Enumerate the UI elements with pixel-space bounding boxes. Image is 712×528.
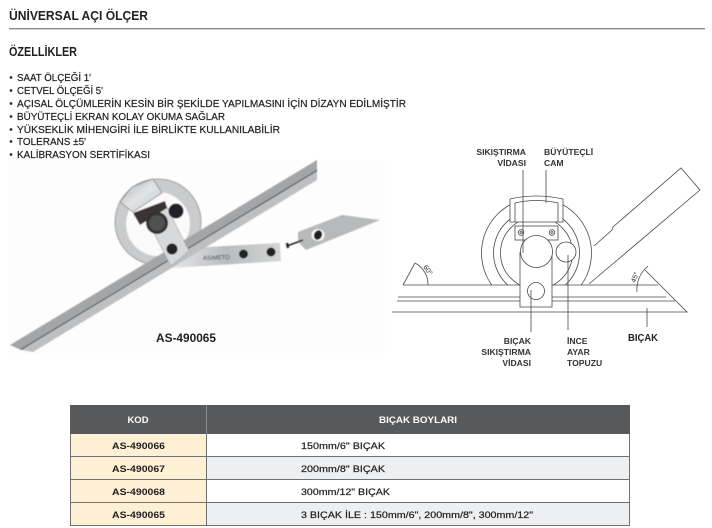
feature list: SAAT ÖLÇEĞİ 1' [17,71,91,84]
label: magnifier glass: BÜYÜTEÇLİ [544,147,593,157]
feature list: BÜYÜTEÇLİ EKRAN KOLAY OKUMA SAĞLAR [17,110,225,123]
feature list [10,71,406,161]
row 4 [70,503,630,525]
blade clamp plate [150,203,189,266]
diagram outline [392,168,700,312]
label: blade clamp screw: VİDASI [502,358,531,368]
label: blade clamp screw: BIÇAK [504,336,532,346]
angle 60: 60° [421,264,434,277]
product code: AS-490065 [156,333,217,345]
row 3 [70,480,630,503]
fine adjustment knob [168,204,184,218]
label: magnifier glass: CAM [544,158,564,168]
magnifier window [120,179,162,212]
title: ÜNİVERSAL AÇI ÖLÇER [9,8,148,23]
row 4: 3 BIÇAK İLE : 150mm/6", 200mm/8", 300mm/12" [301,510,533,521]
small arm: ASIMETO [203,255,230,262]
feature list: AÇISAL ÖLÇÜMLERİN KESİN BİR ŞEKİLDE YAPILMASINI İÇİN DİZAYN EDİLMİŞTİR [17,97,406,110]
row 3: AS-490068 [112,487,165,498]
row 2: AS-490067 [112,464,165,475]
label: clamp screw: SIKIŞTIRMA [476,147,526,157]
table header [70,405,630,434]
row 2 [70,457,630,480]
label: clamp screw: VİDASI [497,158,526,168]
label: fine adjustment knob: TOPUZU [567,358,602,368]
heading: features: ÖZELLİKLER [9,44,77,59]
leader lines [523,170,647,332]
small arm [173,243,281,268]
main blade [10,160,317,352]
feature list: YÜKSEKLİK MİHENGİRİ İLE BİRLİKTE KULLANILABİLİR [17,123,280,136]
detached blade [287,215,380,250]
label: fine adjustment knob: İNCE [567,336,588,346]
row 4: AS-490065 [112,510,166,521]
feature list: KALİBRASYON SERTİFİKASI [17,148,150,161]
centre knob [146,212,168,234]
row 1: 150mm/6" BIÇAK [301,441,386,452]
table header: KOD [127,415,149,426]
dial [115,179,201,265]
row 3: 300mm/12" BIÇAK [301,487,391,498]
label: fine adjustment knob: AYAR [567,347,591,357]
feature list: TOLERANS ±5' [17,136,86,148]
row 2: 200mm/8" BIÇAK [301,464,386,475]
row 1: AS-490066 [112,441,165,452]
screw strip [133,201,167,225]
feature list: CETVEL ÖLÇEĞİ 5' [17,84,103,97]
table header: BIÇAK BOYLARI [379,415,457,426]
label: blade clamp screw: SIKIŞTIRMA [481,347,531,357]
technical diagram [392,147,700,368]
product photo: universal protractor [9,160,385,353]
angle 45: 45° [629,271,641,284]
row 1 [70,434,630,457]
table: blade lengths [70,405,630,526]
clamp knob [166,244,178,254]
label: blade: BIÇAK [628,332,658,344]
